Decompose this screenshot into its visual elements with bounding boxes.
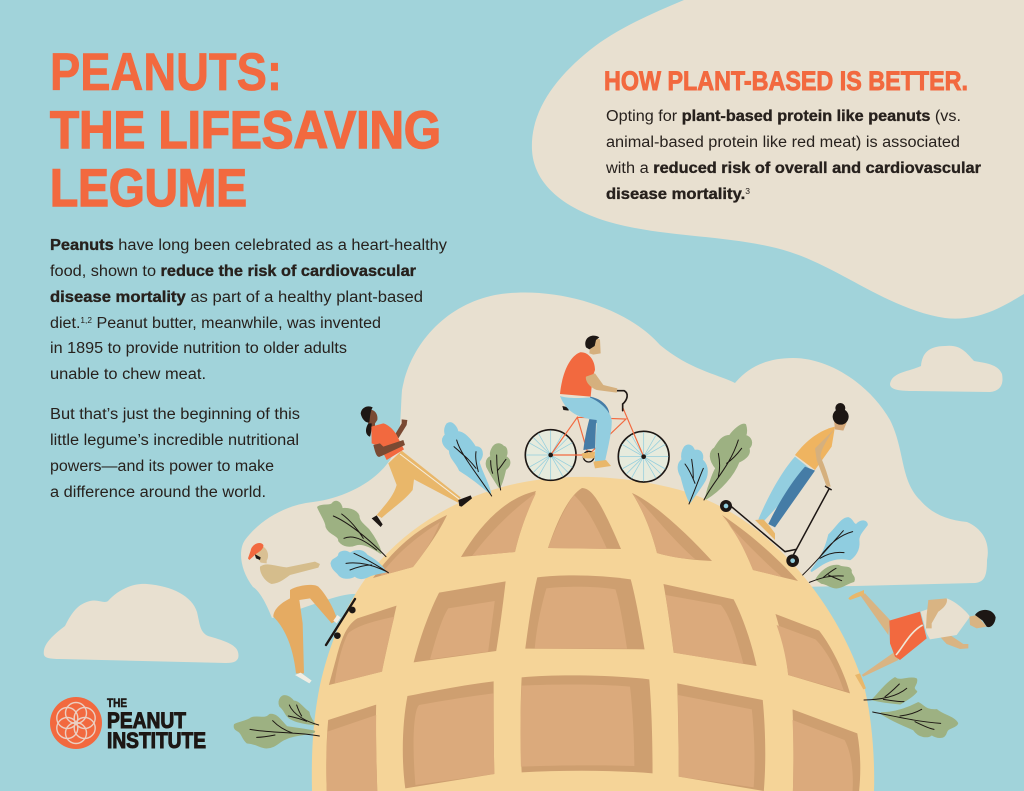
figure: runner in red shorts xyxy=(848,590,996,689)
leaf: green right lower xyxy=(873,703,957,737)
figure: cyclist on bicycle xyxy=(525,336,669,482)
second paragraph: little legume’s incredible nutritional xyxy=(50,432,299,449)
plant-based text block: with a reduced risk of overall and cardiovascular xyxy=(605,160,981,177)
title: LEGUME xyxy=(50,159,247,218)
intro text block: unable to chew meat. xyxy=(50,366,206,383)
heading: how plant-based is better: HOW PLANT-BASED IS BETTER. xyxy=(604,66,968,96)
intro text block: diet. xyxy=(50,315,79,332)
logo: the peanut institute: THE xyxy=(107,696,127,710)
logo: the peanut institute: INSTITUTE xyxy=(107,728,206,753)
globe top row cells xyxy=(373,488,798,581)
figure: runner in orange shirt xyxy=(361,406,472,527)
left side figures and leaves xyxy=(248,406,509,683)
title xyxy=(50,43,441,218)
leaf: green left xyxy=(318,502,386,557)
intro text block: Peanut butter, meanwhile, was invented xyxy=(92,315,381,332)
title: PEANUTS: xyxy=(50,43,282,102)
leaf: green right upper xyxy=(809,566,854,587)
globe lower row cells xyxy=(326,575,860,791)
intro text block: Peanuts have long been celebrated as a heart-healthy xyxy=(50,237,447,254)
intro text block: food, shown to reduce the risk of cardiovascular xyxy=(50,263,416,280)
leaf: green logo-side lower xyxy=(235,715,319,747)
bottom left leaves xyxy=(235,696,319,747)
leaf: green logo-side upper xyxy=(280,696,319,725)
plant-based text block: disease mortality. xyxy=(606,186,745,203)
cloud: central background xyxy=(241,292,988,618)
plant-based text block: Opting for plant-based protein like peanuts (vs. xyxy=(606,108,961,125)
logo: the peanut institute xyxy=(50,696,206,753)
leaf: blue upper xyxy=(443,423,492,496)
second paragraph: But that’s just the beginning of this xyxy=(50,406,300,423)
leaf: blue left xyxy=(332,551,388,578)
leaf: green centre xyxy=(704,425,751,500)
second paragraph: a difference around the world. xyxy=(50,484,266,501)
intro text block: 1,2 xyxy=(80,316,93,325)
figure: scooter rider xyxy=(720,403,849,567)
leaf: green right middle xyxy=(864,678,916,703)
leaf: green upper xyxy=(487,444,509,490)
cloud: top right panel xyxy=(532,0,1024,319)
title: THE LIFESAVING xyxy=(50,101,441,160)
second paragraph xyxy=(50,406,300,501)
intro text block: disease mortality as part of a healthy plant-based xyxy=(50,289,423,306)
plant-based text block: 3 xyxy=(745,187,751,196)
plant-based text block xyxy=(605,108,981,203)
figure: skateboarder xyxy=(248,543,356,683)
second paragraph: powers—and its power to make xyxy=(50,458,274,475)
cloud: small left xyxy=(44,584,238,663)
plant-based text block: animal-based protein like red meat) is associated xyxy=(606,134,960,151)
logo: the peanut institute: PEANUT xyxy=(107,708,186,733)
leaf: blue right xyxy=(803,518,867,575)
peanut globe xyxy=(312,477,874,791)
right side figure and leaves xyxy=(803,518,996,737)
bicycle rider, scooter rider and centre leaves xyxy=(525,336,849,567)
intro text block xyxy=(50,237,447,383)
leaf: blue centre xyxy=(679,446,707,504)
cloud: small right xyxy=(890,346,1002,392)
intro text block: in 1895 to provide nutrition to older adults xyxy=(50,340,347,357)
